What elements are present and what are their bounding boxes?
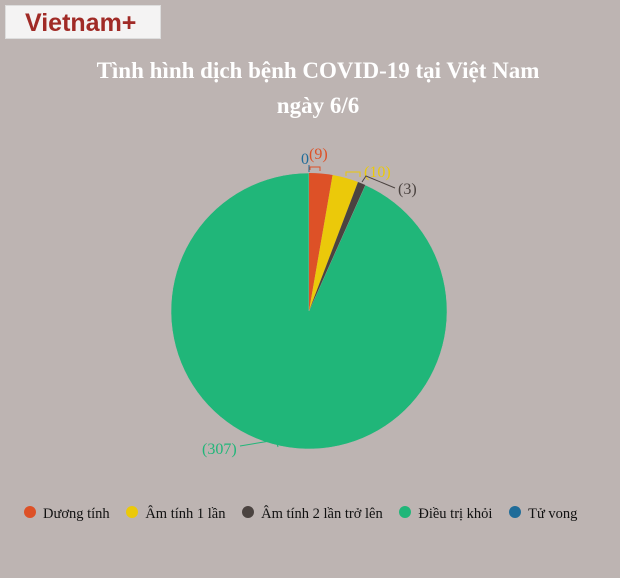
- title: [97, 58, 539, 118]
- slice: am tinh 1 lan: [309, 175, 358, 311]
- slice: duong tinh: [309, 173, 333, 311]
- pie chart: 0: [301, 151, 309, 168]
- slice: am tinh 2 lan: [309, 182, 365, 311]
- pie chart: (3): [398, 181, 417, 198]
- logo: [5, 5, 161, 39]
- title: ngày 6/6: [277, 93, 359, 118]
- slice: dieu tri khoi: [171, 173, 447, 449]
- logo: Vietnam+: [25, 9, 136, 37]
- legend: Dương tính Âm tính 1 lần Âm tính 2 lần trở lên Điều trị khỏi Tử vong: [43, 506, 577, 522]
- title: Tình hình dịch bệnh COVID-19 tại Việt Nam: [97, 58, 539, 83]
- pie chart: (9): [309, 146, 328, 163]
- pie chart: (10): [364, 164, 391, 181]
- pie chart: (307): [202, 441, 237, 458]
- labels: [308, 165, 310, 172]
